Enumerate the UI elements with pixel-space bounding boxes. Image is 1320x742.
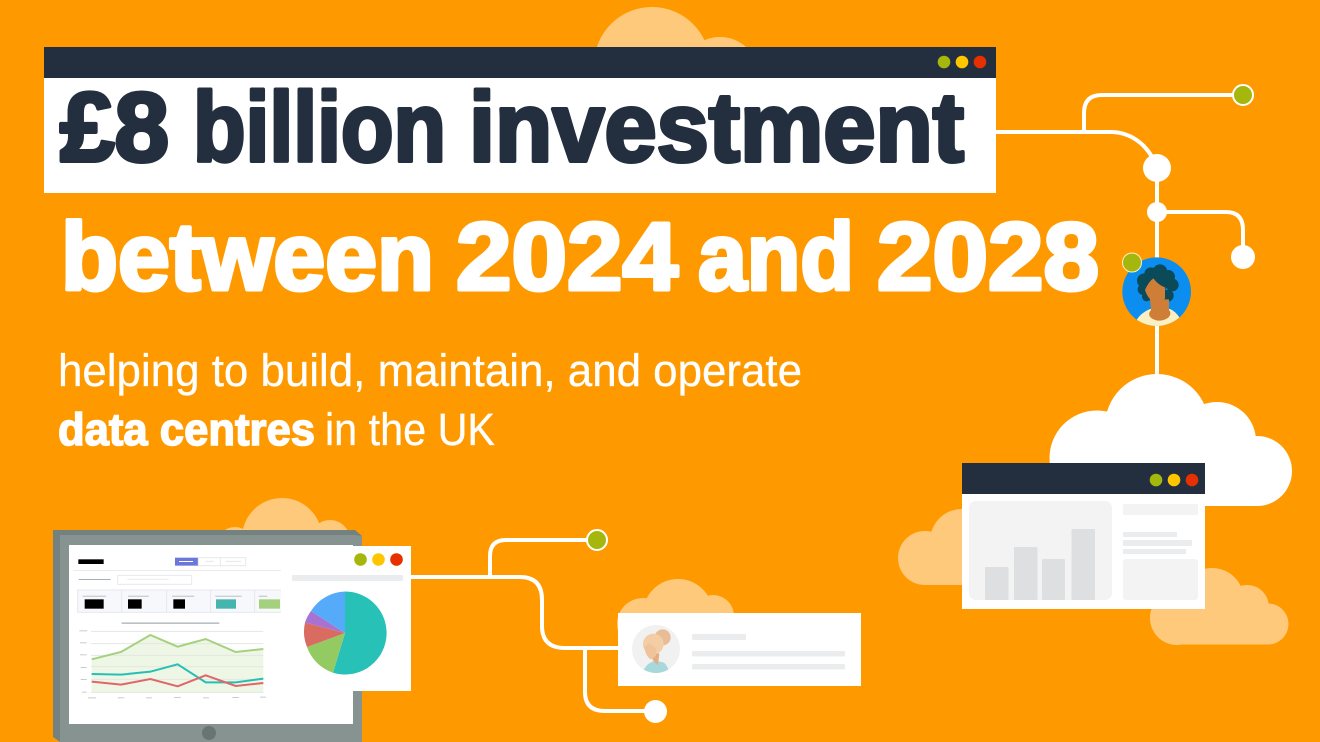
popup heading bar [292, 575, 403, 581]
node: small white [1147, 202, 1167, 222]
text line: helping to build: helping to build, maintain, and operate [58, 345, 802, 396]
node: large white [1143, 154, 1171, 182]
cloud: top background [594, 7, 759, 123]
line chart [79, 630, 266, 698]
window dots [1150, 474, 1198, 486]
avatar: woman [1122, 257, 1191, 327]
browser window: chart [962, 463, 1205, 609]
title window dots [938, 56, 986, 68]
dashboard [73, 558, 283, 698]
chart panel [969, 501, 1112, 600]
subtitle: between 2024 and 2028: between [61, 204, 434, 311]
light cloud: behind monitor [217, 498, 350, 578]
subtitle: between 2024 and 2028: and [698, 204, 854, 311]
text line: data centres in the UK: data centres [58, 404, 315, 455]
node: right white [1231, 245, 1255, 269]
title [60, 72, 964, 182]
white cloud [1050, 374, 1292, 506]
monitor button [202, 726, 216, 740]
title: billion [193, 72, 446, 182]
subtitle: between 2024 and 2028 [61, 204, 1099, 311]
light cloud: left of window [898, 509, 994, 585]
node: avatar green [1122, 253, 1142, 272]
card avatar [632, 625, 680, 673]
popup window: pie chart [281, 546, 411, 691]
title window [44, 47, 996, 193]
title: investment [469, 72, 964, 182]
text line: data centres in the UK: in the UK [325, 404, 495, 455]
light cloud: right of window [1150, 568, 1288, 645]
profile card [618, 613, 861, 686]
title: £8 [60, 72, 169, 182]
light cloud: behind card [617, 579, 734, 650]
pie chart [304, 591, 387, 674]
subtitle: between 2024 and 2028: 2028 [877, 204, 1099, 311]
monitor [53, 530, 362, 742]
popup dots [354, 553, 403, 566]
connector lines: top right [996, 95, 1243, 375]
connector lines: bottom [405, 540, 655, 711]
node: bottom white [644, 700, 667, 723]
node: bottom green [587, 530, 607, 550]
subtitle: between 2024 and 2028: 2024 [456, 204, 678, 311]
text line: data centres in the UK [58, 404, 495, 455]
card text lines [692, 634, 845, 670]
node: top right green [1233, 85, 1253, 105]
side panel [1123, 504, 1198, 600]
